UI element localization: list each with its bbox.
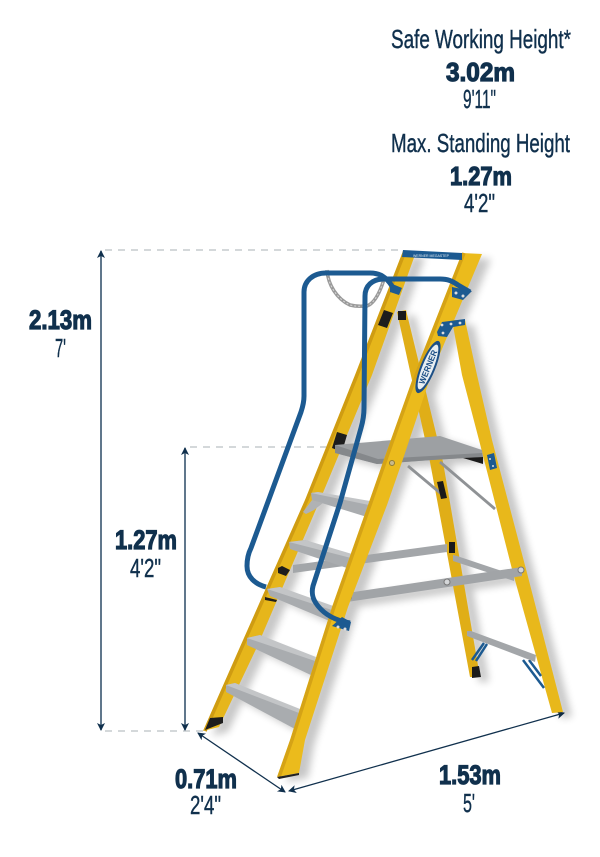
treads [226, 492, 370, 729]
heading: safe working height [391, 24, 571, 114]
upper left bracket [390, 283, 402, 295]
Werner badge: WERNER [417, 348, 439, 386]
dimension: width 1.53m: 1.53m [439, 760, 501, 790]
platform side bracket [487, 453, 497, 470]
dimension: depth 0.71m [175, 733, 285, 820]
right front stile [277, 253, 482, 779]
front cross rail [344, 567, 524, 602]
Werner badge [411, 338, 445, 396]
left front stile [203, 251, 416, 731]
dimension: depth 0.71m: 0.71m [175, 764, 237, 794]
rear diagonal stays [408, 462, 495, 509]
dimension: platform height 1.27m: 4'2" [130, 553, 161, 583]
platform [335, 436, 483, 464]
heading: max standing height [391, 128, 571, 218]
lower rail bracket [332, 617, 351, 631]
tread 5 [226, 683, 300, 729]
heading: safe working height: 3.02m [446, 57, 515, 87]
heading: safe working height: 9'11" [463, 84, 496, 114]
dimension: overall height 2.13m: 2.13m [29, 305, 92, 335]
top cap: WERNER MEGASTEP [413, 254, 450, 258]
dimension: platform height 1.27m: 1.27m [115, 525, 177, 555]
ladder drop shadow [212, 256, 572, 782]
dimension: platform height 1.27m [105, 447, 332, 731]
hinge plate at platform [332, 432, 347, 452]
dimension: overall height 2.13m: 7' [55, 333, 66, 363]
rear inner leg [397, 310, 480, 677]
rear hand rail [247, 273, 392, 587]
rear blue feet braces [472, 643, 544, 688]
dimension: width 1.53m: 5' [463, 788, 475, 818]
dimension: overall height 2.13m [29, 250, 403, 730]
rear leg rails [293, 544, 536, 662]
ladder [203, 250, 572, 782]
dimension: depth 0.71m: 2'4" [190, 790, 221, 820]
rear leg plates [398, 311, 481, 678]
tread 1 [303, 492, 370, 517]
upper right bracket [452, 287, 472, 300]
foot and hinge plates [205, 310, 393, 730]
rail bracket plates [332, 283, 497, 631]
heading: max standing height: 4'2" [464, 188, 495, 218]
tread 3 [267, 587, 336, 622]
tread 4 [247, 635, 316, 676]
tread 2 [289, 540, 352, 569]
chain [327, 270, 385, 306]
rear leg top bracket [437, 319, 465, 337]
top cap [402, 250, 462, 260]
dimension: width 1.53m [289, 713, 564, 818]
front hand rail [312, 279, 470, 623]
heading: max standing height: 1.27m [450, 161, 512, 191]
rear outer leg [452, 320, 563, 713]
